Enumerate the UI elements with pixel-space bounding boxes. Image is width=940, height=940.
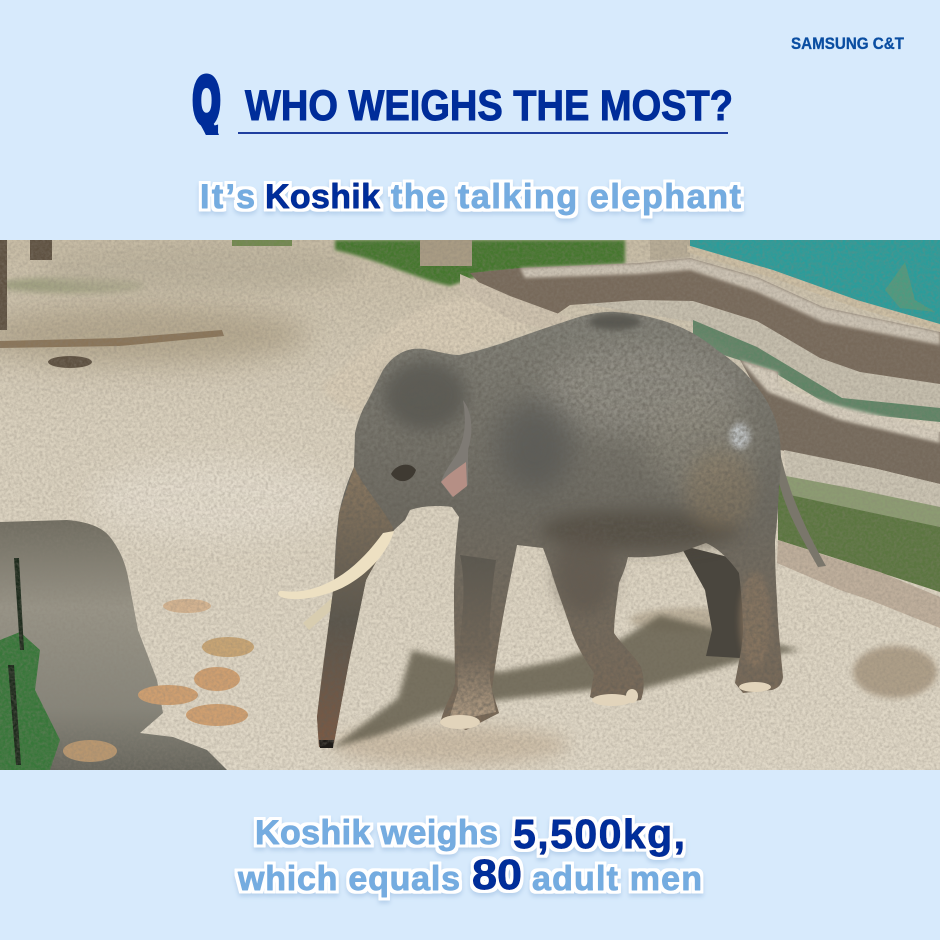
body, head, trunk and legs: [317, 312, 783, 747]
rock rim two: [740, 360, 940, 484]
ear: [441, 400, 471, 497]
pool two concrete: [784, 450, 940, 508]
logo: Samsung C&T: SAMSUNG C&T: [791, 34, 905, 53]
front leg tones: [448, 555, 496, 722]
elephant shadow: [332, 615, 800, 748]
trunk tip: [319, 740, 334, 748]
caption weight figure: 5,500kg,: [513, 811, 685, 857]
trunk shading: [317, 467, 394, 747]
caption line one lead: Koshik weighs: [255, 814, 498, 852]
icon: letter Q: Q: [193, 63, 220, 137]
caption line two lead: which equals: [237, 860, 460, 898]
eye: [391, 465, 416, 481]
caption men figure: 80: [472, 851, 522, 899]
plant and fence: [0, 558, 60, 770]
tail: [778, 447, 826, 567]
body shading: [383, 314, 771, 668]
small tusk: [303, 598, 332, 630]
photo: elephant in enclosure: [0, 240, 940, 770]
subtitle remaining words: the talking elephant: [391, 178, 741, 216]
pool two pale waterline: [786, 476, 940, 527]
title: question heading: [192, 74, 732, 135]
noise texture on ground: [0, 240, 940, 770]
ear pink patch: [441, 462, 467, 497]
wooden posts: [0, 240, 690, 330]
orange mud patches: [63, 599, 254, 762]
icon: letter Q: [192, 74, 220, 135]
shadow bottom left: [0, 520, 227, 770]
grass: [335, 240, 625, 286]
ground: [0, 240, 940, 770]
subtitle highlighted name: Koshik: [265, 178, 380, 216]
grass strip far left: [232, 240, 292, 246]
elephant skin texture: [318, 312, 783, 746]
log: [0, 330, 224, 348]
far hind leg: [684, 548, 743, 658]
green plant at water edge: [885, 262, 935, 312]
pale mound behind elephant: [408, 299, 512, 322]
ground patches: [0, 244, 937, 765]
caption: [237, 811, 702, 899]
rock rim one: [460, 258, 940, 384]
subtitle: [200, 178, 741, 216]
question text: WHO WEIGHS THE MOST?: [245, 82, 733, 130]
dung: [48, 356, 92, 368]
toes: [440, 682, 771, 729]
pool one concrete: [592, 302, 940, 408]
elephant: [278, 300, 826, 760]
title underline: [238, 132, 728, 134]
subtitle lead word: It’s: [200, 178, 255, 216]
pool two water: [778, 478, 940, 592]
tusk: [278, 531, 394, 599]
pool one water: [693, 320, 940, 422]
pale water rim: [687, 245, 940, 332]
rock mound right: [777, 540, 940, 628]
teal water: [690, 240, 940, 330]
caption line two end: adult men: [532, 860, 702, 898]
